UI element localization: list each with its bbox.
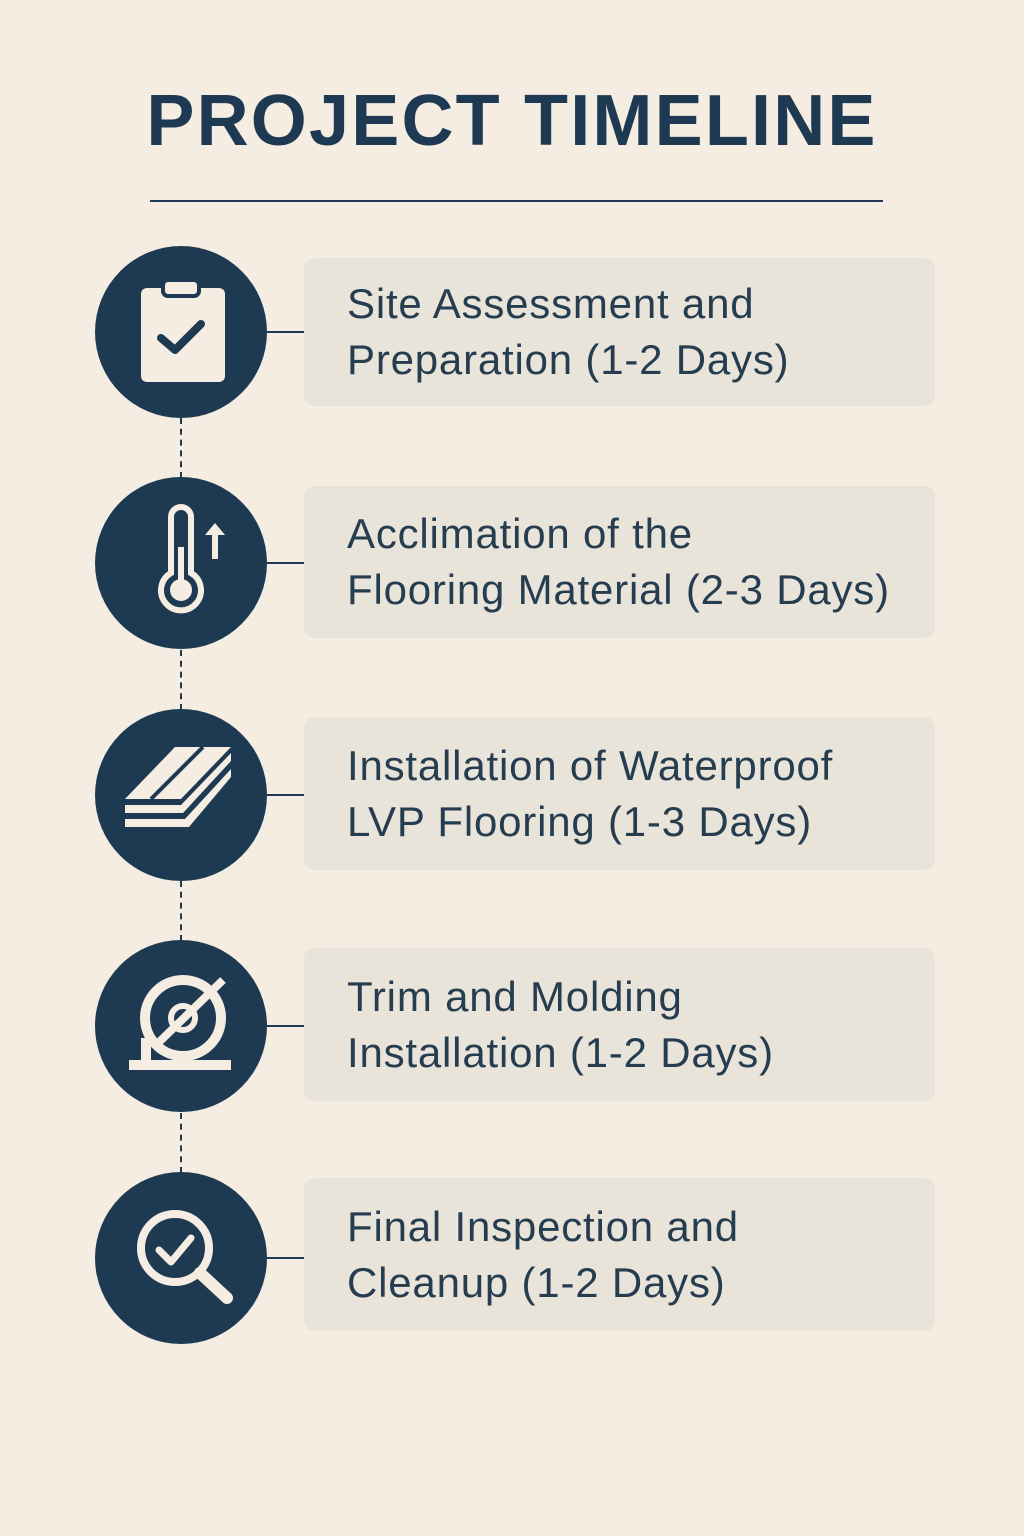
step 3 xyxy=(95,709,935,881)
box: step 3 xyxy=(304,717,935,870)
box: step 4 xyxy=(304,948,935,1101)
box: step 3: LVP Flooring (1-3 Days) xyxy=(347,798,812,844)
box: step 1 xyxy=(304,258,935,406)
box: step 2: Flooring Material (2-3 Days) xyxy=(347,566,890,613)
box: step 2: Acclimation of the xyxy=(347,510,693,557)
step 1 xyxy=(95,246,935,418)
box: step 4: Trim and Molding xyxy=(347,972,683,1020)
box: step 5: Final Inspection and xyxy=(347,1202,739,1250)
icon: clipboard xyxy=(95,246,267,418)
title: PROJECT TIMELINE xyxy=(146,81,878,161)
icon: saw xyxy=(95,940,267,1112)
box: step 2 xyxy=(304,486,935,638)
box: step 4: Installation (1-2 Days) xyxy=(347,1028,774,1076)
step 2 xyxy=(95,477,935,649)
box: step 1: Site Assessment and xyxy=(347,280,754,327)
box: step 3: Installation of Waterproof xyxy=(347,742,833,788)
icon: magnifier xyxy=(95,1172,267,1344)
step 5 xyxy=(95,1172,935,1344)
box: step 5 xyxy=(304,1178,935,1331)
icon: thermometer xyxy=(95,477,267,649)
box: step 1: Preparation (1-2 Days) xyxy=(347,336,789,383)
icon: planks xyxy=(95,709,267,881)
box: step 5: Cleanup (1-2 Days) xyxy=(347,1258,726,1306)
step 4 xyxy=(95,940,935,1112)
